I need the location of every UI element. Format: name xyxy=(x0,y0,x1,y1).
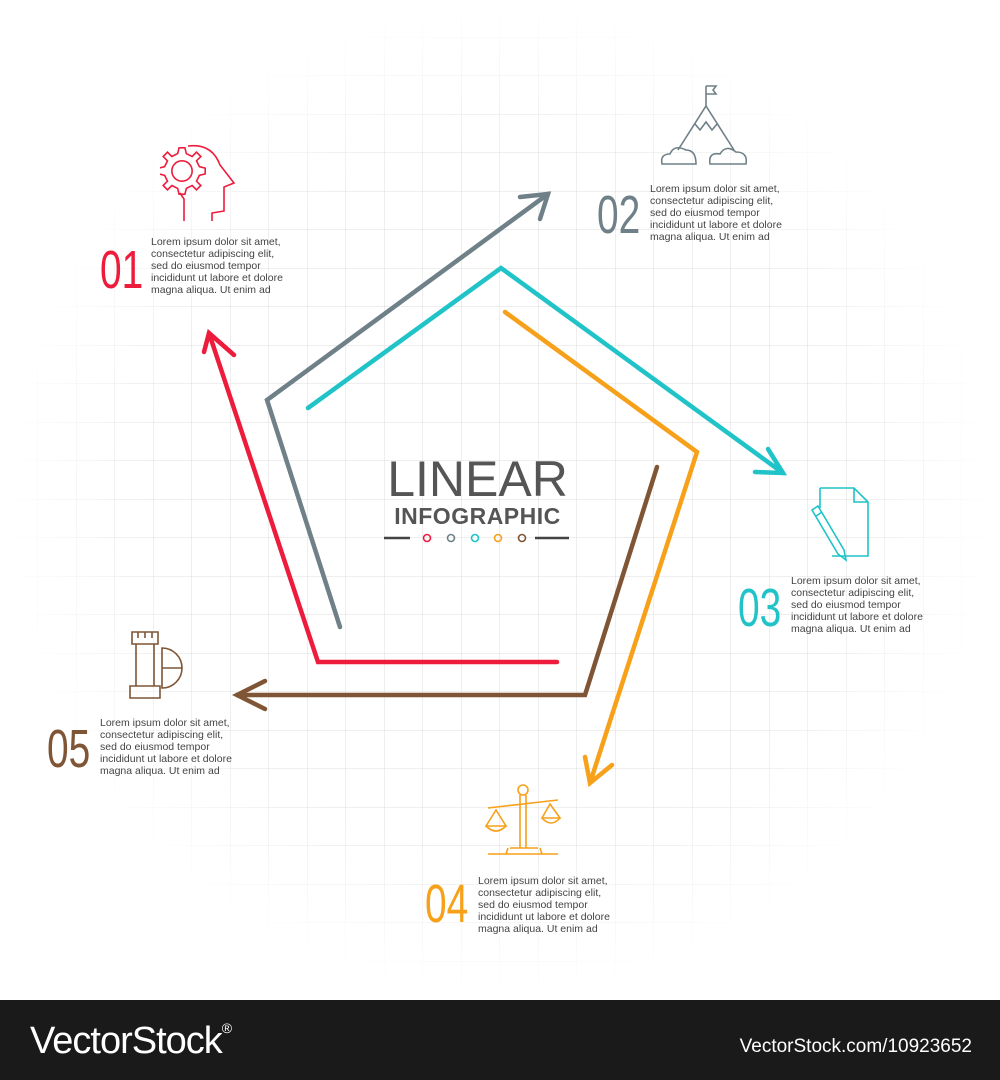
text: Lorem ipsum dolor sit amet, xyxy=(151,236,281,248)
step 05: 05 xyxy=(47,719,90,779)
text: consectetur adipiscing elit, xyxy=(791,587,914,599)
icon: scales xyxy=(484,784,562,855)
text: incididunt ut labore et dolore xyxy=(650,219,782,231)
footer bar xyxy=(0,1000,1000,1080)
icon: mountain with flag xyxy=(660,85,748,165)
text: Lorem ipsum dolor sit amet, xyxy=(650,183,780,195)
text: magna aliqua. Ut enim ad xyxy=(100,765,220,777)
arrow: grey xyxy=(267,194,548,627)
step 04: 04 xyxy=(425,874,468,934)
text: magna aliqua. Ut enim ad xyxy=(650,231,770,243)
icon: document with pen xyxy=(811,487,869,562)
text: incididunt ut labore et dolore xyxy=(100,753,232,765)
text: Lorem ipsum dolor sit amet, xyxy=(478,875,608,887)
title: INFOGRAPHIC xyxy=(394,503,561,529)
text: sed do eiusmod tempor xyxy=(650,207,760,219)
text: magna aliqua. Ut enim ad xyxy=(151,284,271,296)
text: consectetur adipiscing elit, xyxy=(151,248,274,260)
text: sed do eiusmod tempor xyxy=(100,741,210,753)
text: consectetur adipiscing elit, xyxy=(100,729,223,741)
legend dots xyxy=(384,534,569,542)
text: sed do eiusmod tempor xyxy=(791,599,901,611)
text: magna aliqua. Ut enim ad xyxy=(791,623,911,635)
text: sed do eiusmod tempor xyxy=(478,899,588,911)
text: sed do eiusmod tempor xyxy=(151,260,261,272)
arrow: orange xyxy=(505,312,697,783)
text: consectetur adipiscing elit, xyxy=(478,887,601,899)
arrow: brown xyxy=(237,467,657,709)
footer logo: VectorStock® xyxy=(30,1020,231,1062)
arrow: cyan xyxy=(308,268,783,473)
icon: head with gear xyxy=(160,144,236,221)
step 02: 02 xyxy=(597,185,640,245)
arrow: red xyxy=(204,333,557,662)
text: incididunt ut labore et dolore xyxy=(478,911,610,923)
icon: chess rook and pie xyxy=(129,631,183,699)
text: incididunt ut labore et dolore xyxy=(791,611,923,623)
step 03: 03 xyxy=(738,578,781,638)
title xyxy=(384,451,569,542)
text: consectetur adipiscing elit, xyxy=(650,195,773,207)
text: Lorem ipsum dolor sit amet, xyxy=(791,575,921,587)
footer url: VectorStock.com/10923652 xyxy=(740,1036,972,1057)
text: magna aliqua. Ut enim ad xyxy=(478,923,598,935)
text: incididunt ut labore et dolore xyxy=(151,272,283,284)
step 01: 01 xyxy=(100,240,143,300)
text: Lorem ipsum dolor sit amet, xyxy=(100,717,230,729)
title: LINEAR xyxy=(387,451,568,507)
